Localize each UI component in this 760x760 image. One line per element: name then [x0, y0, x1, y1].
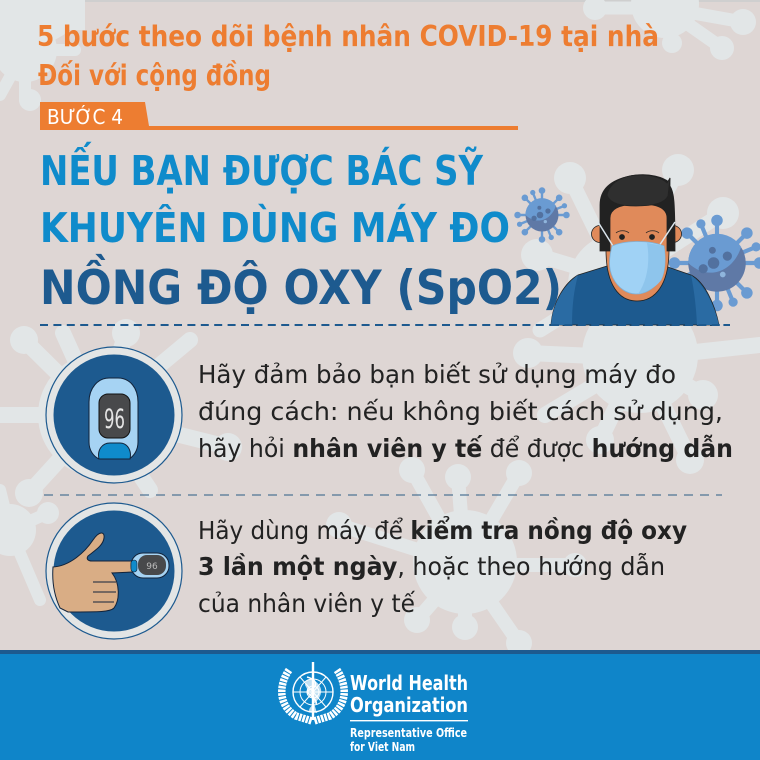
first text block: hãy hỏi nhân viên y tế để được hướng dẫn [198, 434, 733, 463]
step label: Bước 4 [40, 102, 518, 130]
WHO wordmark: for Viet Nam [350, 740, 415, 754]
second text block [198, 515, 687, 618]
WHO wordmark: Representative Office [350, 726, 467, 740]
dashed divider top [40, 324, 730, 326]
main heading: NỒNG ĐỘ OXY (SpO2) [40, 255, 562, 316]
overline title [37, 20, 659, 92]
icon: oximeter circle: 96 [104, 404, 125, 435]
first text block: đúng cách: nếu không biết cách sử dụng, [198, 397, 723, 426]
second text block: của nhân viên y tế [198, 589, 416, 618]
main heading: NẾU BẠN ĐƯỢC BÁC SỸ [40, 141, 484, 195]
icon: WHO emblem [282, 662, 344, 721]
WHO wordmark: Organization [350, 693, 468, 717]
footer band [0, 650, 760, 760]
main heading [40, 141, 562, 316]
illustration: man wearing mask [551, 175, 719, 325]
WHO wordmark [350, 671, 468, 754]
overline title: Đối với cộng đồng [38, 59, 271, 92]
first text block: Hãy đảm bảo bạn biết sử dụng máy đo [198, 360, 676, 389]
WHO wordmark: World Health [350, 671, 468, 695]
icon: oximeter circle [46, 347, 182, 483]
icon: finger in oximeter circle: 96 [146, 562, 158, 572]
icon: small virus [514, 187, 570, 243]
dashed divider middle [44, 494, 722, 496]
icon: finger in oximeter circle [46, 503, 182, 639]
second text block: 3 lần một ngày, hoặc theo hướng dẫn [198, 552, 665, 581]
step label: Bước 4: BƯỚC 4 [47, 105, 123, 129]
overline title: 5 bước theo dõi bệnh nhân COVID-19 tại nhà [37, 20, 659, 53]
dashed line over shirt [551, 324, 730, 326]
first text block [198, 360, 733, 463]
icon: large virus [669, 215, 760, 311]
second text block: Hãy dùng máy để kiểm tra nồng độ oxy [198, 515, 687, 545]
main heading: KHUYÊN DÙNG MÁY ĐO [40, 204, 510, 252]
